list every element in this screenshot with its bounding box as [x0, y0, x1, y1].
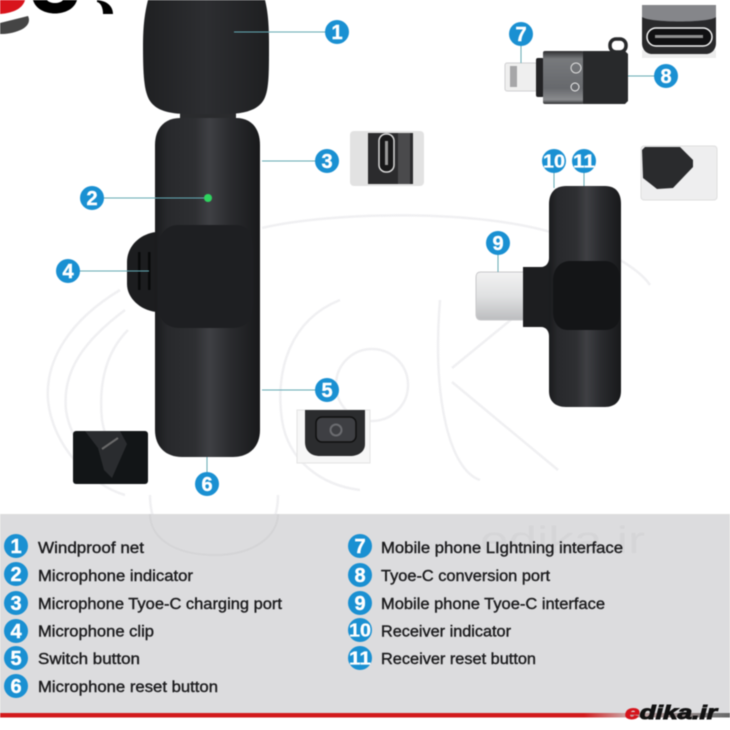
callout 1: [325, 20, 349, 44]
callout 9: 9: [492, 233, 504, 255]
legend item 1: Windproof net: [38, 540, 145, 557]
legend item 5: [4, 646, 140, 670]
body: [155, 118, 260, 457]
legend item 8: Tyoe-C conversion port: [381, 568, 551, 585]
legend item 11: [348, 646, 536, 670]
black section: [583, 51, 628, 104]
legend watermark text: edika.ir: [480, 520, 645, 562]
legend item 4: [4, 619, 154, 643]
neck: [180, 110, 236, 122]
collar: [536, 58, 544, 97]
legend item 6: [4, 674, 218, 698]
legend item 6: Microphone reset button: [38, 679, 218, 696]
receiver: [476, 186, 621, 407]
icons: [571, 63, 581, 73]
background watermark: [48, 215, 650, 555]
legend item 4: 4: [10, 621, 22, 643]
callout 11: 11: [573, 152, 595, 172]
microphone clip: [127, 232, 156, 312]
callout lines: [80, 32, 655, 472]
callout 8: [654, 64, 678, 88]
legend item 3: 3: [10, 593, 22, 615]
legend item 8: 8: [354, 565, 366, 587]
legend item 1: 1: [10, 536, 22, 558]
legend item 7: Mobile phone LIghtning interface: [381, 540, 623, 557]
legend item 10: Receiver indicator: [381, 624, 511, 640]
callout 8: 8: [660, 66, 672, 88]
legend item 2: [4, 562, 193, 586]
callout 1: 1: [331, 22, 343, 44]
callout 2: [80, 186, 104, 210]
callout 4: [56, 259, 80, 283]
callout 10: 10: [543, 152, 565, 172]
receiver panel: [553, 261, 620, 330]
legend item 7: 7: [354, 536, 366, 558]
legend item 2: 2: [10, 564, 22, 586]
callout 5: 5: [321, 380, 333, 402]
type-c plug: [476, 272, 525, 320]
legend item 8: [348, 563, 551, 587]
lightning plug: [505, 63, 537, 91]
inset: reset hole: [73, 431, 148, 484]
legend item 3: [4, 591, 283, 615]
callout 9: [486, 231, 510, 255]
plug neck: [523, 258, 549, 336]
callout 10: [542, 149, 566, 173]
receiver body: [549, 186, 621, 407]
window panel: [158, 225, 253, 328]
legend item 9: 9: [354, 593, 366, 615]
legend item 10: 10: [349, 620, 371, 640]
corner logo fragment: [0, 0, 113, 34]
microphone: [127, 0, 269, 457]
legend item 9: Mobile phone Tyoe-C interface: [381, 596, 605, 613]
legend item 7: [348, 534, 623, 558]
legend item 11: 11: [349, 648, 371, 668]
inset: adapter port: [642, 5, 716, 58]
adapter: [505, 39, 628, 104]
green indicator: [204, 194, 212, 202]
legend item 5: 5: [10, 648, 22, 670]
legend item 4: Microphone clip: [38, 624, 154, 640]
callout 7: 7: [515, 24, 527, 46]
footer rule: [0, 713, 730, 718]
legend item 2: Microphone indicator: [38, 568, 193, 585]
callout 11: [572, 149, 596, 173]
inset: receiver reset: [641, 146, 717, 200]
callout 3: [315, 149, 339, 173]
edika.ir logo: edika.ir: [625, 703, 719, 724]
callout 5: [315, 378, 339, 402]
legend item 6: 6: [10, 676, 22, 698]
inset: switch button: [297, 410, 370, 463]
callout 4: 4: [62, 261, 74, 283]
legend item 9: [348, 591, 605, 615]
legend item 11: Receiver reset button: [381, 651, 536, 668]
legend item 1: [4, 534, 145, 558]
callout 7: [509, 22, 533, 46]
inset: type-c port: [350, 131, 424, 186]
keyring: [610, 39, 626, 52]
legend item 5: Switch button: [38, 651, 140, 668]
callout 3: 3: [321, 151, 333, 173]
legend watermark blob: [150, 514, 278, 555]
legend item 3: Microphone Tyoe-C charging port: [38, 596, 283, 613]
legend panel: [0, 514, 730, 713]
metal section: [543, 51, 584, 104]
callout 6: [195, 472, 219, 496]
legend item 10: [348, 618, 511, 642]
windproof foam: [143, 0, 269, 114]
callout 2: 2: [86, 188, 98, 210]
callout 6: 6: [201, 474, 213, 496]
